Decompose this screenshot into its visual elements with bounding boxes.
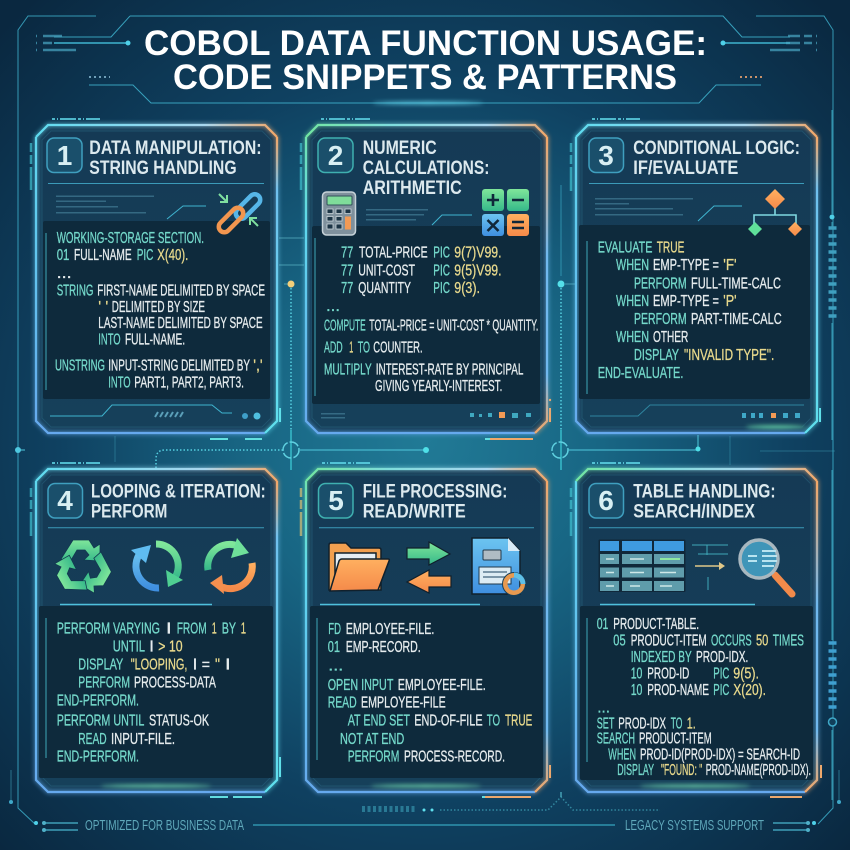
panel 4 code: STATUS-OK bbox=[149, 713, 209, 730]
panel 6 code: INDEXED BY bbox=[631, 649, 692, 666]
panel 3 code: "INVALID TYPE". bbox=[684, 347, 774, 364]
panel 4 code: I bbox=[166, 620, 172, 637]
panel 2 code: TOTAL-PRICE bbox=[359, 245, 428, 262]
panel 6 code: "FOUND: " bbox=[661, 762, 702, 779]
panel 1 code: INPUT-STRING DELIMITED BY bbox=[108, 358, 250, 375]
panel 5 code: READ bbox=[328, 695, 357, 712]
panel 6 heading: SEARCH/INDEX bbox=[633, 500, 755, 522]
panel 2 footer decoration bbox=[321, 412, 531, 418]
panel 6 code: 9(5). bbox=[733, 666, 759, 683]
panel 2 code: ADD bbox=[324, 339, 343, 356]
panel 6 heading: TABLE HANDLING: bbox=[633, 480, 776, 502]
panel 5 code: TRUE bbox=[505, 713, 532, 730]
panel 2 code: 77 bbox=[341, 263, 353, 280]
panel 2: numeric calculations bbox=[306, 125, 547, 433]
panel 6 code: WHEN bbox=[608, 746, 636, 763]
panel 2 code: MULTIPLY bbox=[324, 361, 372, 378]
panel 2 code: PIC bbox=[433, 263, 450, 280]
panel 2 code box bbox=[312, 226, 540, 404]
panel 2 number badge bbox=[318, 138, 353, 172]
panel 6 number badge: 6 bbox=[598, 485, 614, 516]
icon: data document with disc bbox=[472, 538, 526, 596]
panel 5 code: 01 bbox=[328, 639, 340, 656]
panel 1 code box bbox=[43, 221, 270, 399]
title: CODE SNIPPETS & PATTERNS bbox=[173, 58, 677, 97]
panel 2 code: TOTAL-PRICE = UNIT-COST * QUANTITY. bbox=[369, 318, 538, 335]
panel 6 code box bbox=[580, 606, 813, 780]
panel 4 code: END-PERFORM. bbox=[57, 749, 139, 766]
panel 3 code box bbox=[579, 225, 810, 399]
side tick decoration bbox=[828, 643, 836, 726]
panel 2 code: PIC bbox=[433, 280, 450, 297]
panel 5 code: ... bbox=[328, 658, 343, 675]
footer right label: LEGACY SYSTEMS SUPPORT bbox=[625, 817, 764, 834]
panel 3 code: OTHER bbox=[653, 329, 688, 346]
panel 6: table handling bbox=[576, 469, 836, 792]
panel 3 heading: IF/EVALUATE bbox=[633, 157, 738, 179]
panel 1 code: FULL-NAME. bbox=[125, 331, 185, 348]
panel 3 number badge bbox=[589, 138, 624, 172]
icon: calculator bbox=[322, 192, 356, 235]
icon: recycle arrows bbox=[51, 540, 117, 600]
panel 1 code: PIC bbox=[137, 247, 153, 264]
panel 4 glow accent bbox=[101, 785, 211, 787]
panel 3 code: DISPLAY bbox=[634, 347, 679, 364]
panel 2 code: 9(5)V99. bbox=[454, 263, 502, 280]
panel 4 code: PROCESS-DATA bbox=[134, 674, 216, 691]
panel 6 code: OCCURS bbox=[711, 632, 752, 649]
panel 4 code: END-PERFORM. bbox=[57, 693, 139, 710]
panel 6 heading bbox=[633, 480, 776, 522]
panel 3 code: WHEN bbox=[616, 293, 649, 310]
panel 4 code: I bbox=[225, 656, 231, 673]
panel 2 code: 9(3). bbox=[454, 280, 480, 297]
panel 6 code: PIC bbox=[713, 682, 729, 699]
panel 3 footer decoration bbox=[590, 405, 804, 418]
panel 1 code: FULL-NAME bbox=[74, 247, 132, 264]
panel 3 code: PART-TIME-CALC bbox=[691, 311, 782, 328]
panel 6 code: SET bbox=[597, 715, 615, 732]
panel 6 code: PROD-NAME bbox=[647, 682, 709, 699]
panel 5 code: PROCESS-RECORD. bbox=[404, 749, 505, 766]
panel 4 code: > 10 bbox=[158, 639, 183, 656]
panel 2 code: 77 bbox=[341, 245, 353, 262]
panel 6 code: TO bbox=[671, 715, 682, 732]
panel 6 frame bbox=[576, 469, 817, 792]
panel 4 code bbox=[57, 620, 246, 766]
panel 2 code: COMPUTE bbox=[324, 318, 366, 335]
panel 4 number badge: 4 bbox=[57, 485, 73, 516]
panel 3 code: END-EVALUATE. bbox=[598, 365, 683, 382]
panel 5 code: EMPLOYEE-FILE. bbox=[346, 621, 434, 638]
panel 2 code: QUANTITY bbox=[358, 280, 411, 297]
panel 1 frame bbox=[36, 125, 277, 433]
panel 6 code: 01 bbox=[597, 616, 608, 633]
panel 5 code: EMPLOYEE-FILE. bbox=[398, 677, 486, 694]
panel 6 glow accent bbox=[640, 785, 750, 787]
panel 3 code: WHEN bbox=[616, 329, 649, 346]
panel 5 code: FD bbox=[328, 621, 341, 638]
panel 2 frame bbox=[306, 125, 547, 433]
panel 1 code: DELIMITED BY SIZE bbox=[112, 299, 205, 316]
panel 2 heading: ARITHMETIC bbox=[363, 177, 462, 199]
panel 5 code bbox=[328, 621, 532, 766]
panel 3: conditional logic bbox=[576, 125, 836, 433]
panel 6 code: DISPLAY bbox=[617, 762, 654, 779]
panel 6 code: SEARCH bbox=[597, 731, 635, 748]
panel 6 code: PRODUCT-ITEM bbox=[631, 632, 707, 649]
panel 1 code: ',' bbox=[253, 358, 263, 375]
panel 5 glow accent bbox=[371, 785, 481, 787]
panel 6 number badge bbox=[589, 484, 624, 518]
panel 2 code: UNIT-COST bbox=[358, 263, 415, 280]
panel 4 code: READ bbox=[78, 731, 107, 748]
panel 1 code: 01 bbox=[57, 247, 69, 264]
panel 2 heading: CALCULATIONS: bbox=[363, 157, 489, 179]
panel 1 code: FIRST-NAME DELIMITED BY SPACE bbox=[97, 283, 265, 300]
panel 4 code: "LOOPING, bbox=[131, 656, 187, 673]
panel 4 code: " bbox=[215, 656, 220, 673]
icon: data table bbox=[598, 540, 686, 592]
panel 5 code box bbox=[310, 606, 543, 778]
icon: arrow to magnifier bbox=[692, 545, 728, 590]
panel 1 footer decoration bbox=[50, 405, 260, 420]
panel 1 code: X(40). bbox=[157, 247, 188, 264]
panel 1 code: LAST-NAME DELIMITED BY SPACE bbox=[98, 315, 263, 332]
panel 5 code: OPEN INPUT bbox=[328, 677, 394, 694]
panel 6 code: 1. bbox=[687, 715, 696, 732]
panel 1 heading bbox=[89, 137, 262, 179]
panel 5 number badge: 5 bbox=[328, 485, 344, 516]
panel 1 code: UNSTRING bbox=[55, 358, 105, 375]
panel 4 code: PERFORM bbox=[78, 674, 130, 691]
panel 1 code: ' ' bbox=[98, 299, 108, 316]
panel 6 code: PROD-IDX bbox=[618, 715, 666, 732]
panel 3 heading bbox=[633, 137, 800, 179]
panel 2 code: 77 bbox=[341, 280, 353, 297]
panel 2 code bbox=[324, 245, 538, 395]
panel 3 frame bbox=[576, 125, 817, 433]
panel 6 code bbox=[597, 616, 811, 779]
title bbox=[144, 24, 707, 97]
panel 5 heading: READ/WRITE bbox=[363, 500, 466, 522]
panel 3 code: 'F' bbox=[723, 257, 737, 274]
panel 5 frame bbox=[306, 469, 547, 792]
icon: decision flow diagram bbox=[748, 189, 802, 236]
panel 4 code: FROM bbox=[177, 620, 207, 637]
panel 4 code: INPUT-FILE. bbox=[111, 731, 175, 748]
panel 1 code: INTO bbox=[108, 374, 131, 391]
panel 1: data manipulation bbox=[36, 125, 277, 433]
panel 4 code box bbox=[39, 606, 273, 778]
panel 1 number badge: 1 bbox=[57, 140, 72, 171]
panel 2 code: 9(7)V99. bbox=[454, 245, 502, 262]
panel 5 code: EMP-RECORD. bbox=[346, 639, 421, 656]
title: COBOL DATA FUNCTION USAGE: bbox=[144, 24, 707, 63]
panel 5: file processing bbox=[306, 469, 547, 792]
panel 5 heading bbox=[363, 480, 507, 522]
panel 6 code: PRODUCT-TABLE. bbox=[613, 616, 699, 633]
panel 2 code: PIC bbox=[433, 245, 450, 262]
panel 6 code: 10 bbox=[631, 666, 643, 683]
panel 6 code: PIC bbox=[713, 666, 729, 683]
panel 5 code: PERFORM bbox=[348, 749, 399, 766]
footer left label: OPTIMIZED FOR BUSINESS DATA bbox=[85, 817, 244, 834]
panel 3 fine print decoration bbox=[595, 198, 742, 221]
panel 5 heading: FILE PROCESSING: bbox=[363, 480, 507, 502]
panel 4 code: I bbox=[149, 639, 154, 656]
panel 2 code: COUNTER. bbox=[373, 339, 423, 356]
panel 6 code: X(20). bbox=[733, 682, 766, 699]
panel 4 heading: LOOPING & ITERATION: bbox=[91, 480, 266, 502]
panel 2 fine print decoration bbox=[366, 209, 472, 225]
panel 2 code: 1 bbox=[349, 339, 353, 356]
panel 4 code: BY bbox=[222, 620, 236, 637]
panel 4 code: PERFORM UNTIL bbox=[57, 713, 145, 730]
panel 3 number badge: 3 bbox=[598, 140, 614, 171]
panel 4 frame bbox=[36, 469, 277, 792]
panel 4: looping and iteration bbox=[36, 469, 277, 792]
panel 3 code: WHEN bbox=[616, 257, 649, 274]
panel 5 code: END-OF-FILE bbox=[414, 713, 483, 730]
panel 2 heading bbox=[363, 137, 489, 199]
panel 2 heading: NUMERIC bbox=[363, 137, 437, 159]
panel 3 code bbox=[598, 239, 782, 382]
panel 1 code: WORKING-STORAGE SECTION. bbox=[57, 230, 204, 247]
panel 1 heading: STRING HANDLING bbox=[89, 157, 237, 179]
panel 4 number badge bbox=[48, 484, 82, 518]
panel 4 heading bbox=[91, 480, 266, 522]
panel 6 code: ... bbox=[597, 699, 610, 716]
panel 6 code: PROD-IDX. bbox=[696, 649, 748, 666]
panel 6 code: 50 bbox=[756, 632, 769, 649]
panel 3 code: EMP-TYPE = bbox=[653, 293, 719, 310]
panel 6 code: TIMES bbox=[773, 632, 804, 649]
panel 6 code: PROD-ID bbox=[647, 666, 689, 683]
panel 3 heading: CONDITIONAL LOGIC: bbox=[633, 137, 800, 159]
panel 2 number badge: 2 bbox=[328, 140, 343, 171]
icon: math operator tiles bbox=[482, 189, 529, 236]
panel 3 code: FULL-TIME-CALC bbox=[691, 275, 781, 292]
panel 3 code: TRUE bbox=[657, 239, 684, 256]
panel 5 code: NOT AT END bbox=[340, 731, 404, 748]
panel 4 code: = bbox=[202, 656, 210, 673]
icon: read write arrows bbox=[407, 542, 451, 593]
panel 1 code bbox=[55, 230, 265, 391]
panel 3 code: EVALUATE bbox=[598, 239, 652, 256]
panel 6 code: 10 bbox=[631, 682, 643, 699]
panel 1 code: INTO bbox=[98, 331, 121, 348]
panel 5 code: AT END SET bbox=[348, 713, 410, 730]
panel 5 code: TO bbox=[487, 713, 500, 730]
panel 4 code: 1 bbox=[241, 620, 246, 637]
panel 4 heading: PERFORM bbox=[91, 500, 167, 522]
panel 4 code: PERFORM VARYING bbox=[57, 620, 160, 637]
panel 1 number badge bbox=[47, 138, 82, 172]
icon: circular arrows bbox=[131, 544, 183, 588]
panel 2 code: GIVING YEARLY-INTEREST. bbox=[375, 378, 502, 395]
panel 4 code: UNTIL bbox=[113, 639, 145, 656]
panel 6 code: 05 bbox=[613, 632, 626, 649]
panel 3 code: EMP-TYPE = bbox=[653, 257, 719, 274]
panel 2 code: INTEREST-RATE BY PRINCIPAL bbox=[376, 361, 524, 378]
icon: open folder bbox=[329, 543, 389, 591]
panel 5 number badge bbox=[318, 484, 353, 518]
icon: magnifying glass bbox=[740, 540, 792, 594]
panel 3 code: PERFORM bbox=[634, 311, 687, 328]
panel 6 code: PRODUCT-ITEM bbox=[639, 731, 712, 748]
panel 1 fine print decoration bbox=[56, 196, 206, 219]
panel 2 code: TO bbox=[358, 339, 370, 356]
panel 3 code: PERFORM bbox=[634, 275, 687, 292]
panel 1 code: STRING bbox=[57, 283, 93, 300]
panel 1 code: ... bbox=[57, 265, 72, 282]
panel 4 code: DISPLAY bbox=[78, 656, 123, 673]
panel 1 heading: DATA MANIPULATION: bbox=[89, 137, 262, 159]
panel 1 code: PART1, PART2, PART3. bbox=[134, 374, 244, 391]
panel 4 code: I bbox=[193, 656, 197, 673]
panel 2 code: ... bbox=[326, 298, 340, 315]
side tick decoration bbox=[828, 228, 836, 316]
panel 4 code: 1 bbox=[212, 620, 217, 637]
panel 3 code: 'P' bbox=[723, 293, 737, 310]
icon: chain link bbox=[217, 192, 262, 234]
panel 5 code: EMPLOYEE-FILE bbox=[361, 695, 446, 712]
icon: refresh arrows bbox=[208, 538, 252, 594]
